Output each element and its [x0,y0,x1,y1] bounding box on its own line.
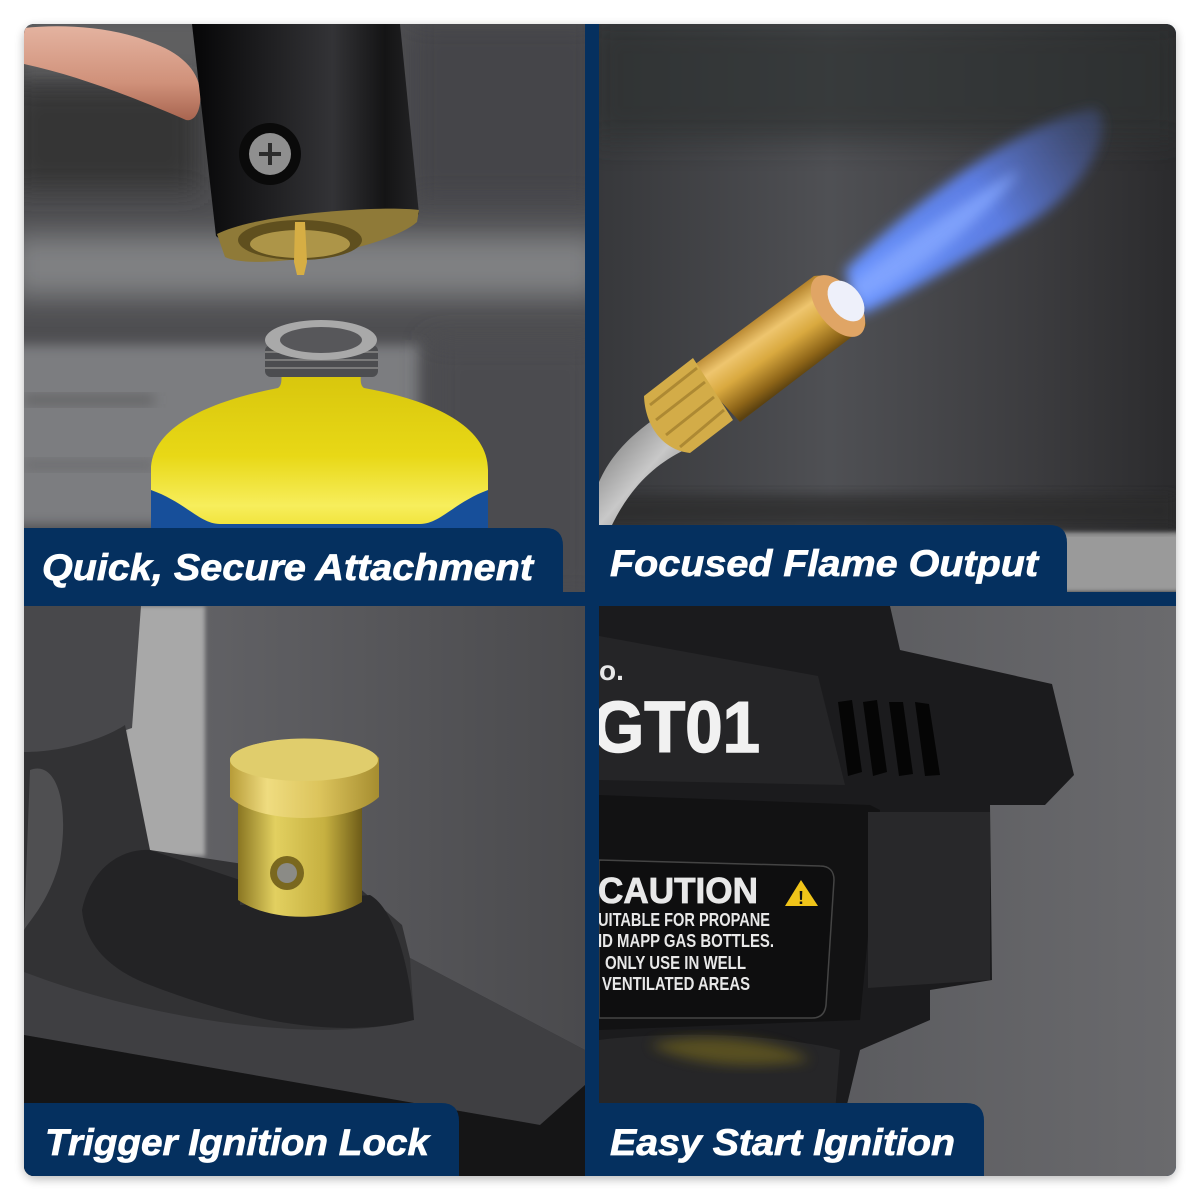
panel: quick secure attachment photo [10,20,600,600]
panel: easy start ignition photo [592,606,1176,1176]
label: Trigger Ignition Lock: Trigger Ignition Lock [45,1122,432,1163]
icon: torch body [24,606,585,1176]
label: Trigger Ignition Lock [24,1103,459,1176]
panel: trigger ignition lock photo [24,606,585,1176]
icon: torch body with caution label [599,606,1074,1103]
panel: focused flame output photo [590,20,1190,592]
icon: gas cylinder [151,320,488,528]
caution label: ID MAPP GAS BOTTLES. [598,931,774,951]
caution label: VENTILATED AREAS [602,974,750,994]
label: Focused Flame Output: Focused Flame Output [610,543,1040,584]
caution label: UITABLE FOR PROPANE [598,910,770,930]
icon: torch body with caution label: o. [599,655,624,686]
label: Easy Start Ignition [585,1103,984,1176]
icon: finger [24,26,200,120]
label: Easy Start Ignition: Easy Start Ignition [610,1122,955,1163]
label: Quick, Secure Attachment: Quick, Secure Attachment [42,547,535,588]
icon: brass nozzle [599,265,876,525]
label: Focused Flame Output [585,525,1067,592]
caution label [598,860,834,1018]
icon: torch connector [192,24,419,275]
caution label: CAUTION [598,870,758,911]
icon: brass lock button [230,738,379,917]
caution label: ! [798,888,804,908]
model number: GT01 [592,688,760,768]
label: Quick, Secure Attachment [24,528,563,592]
caution label: ONLY USE IN WELL [605,953,746,973]
icon: blue flame [845,108,1103,315]
